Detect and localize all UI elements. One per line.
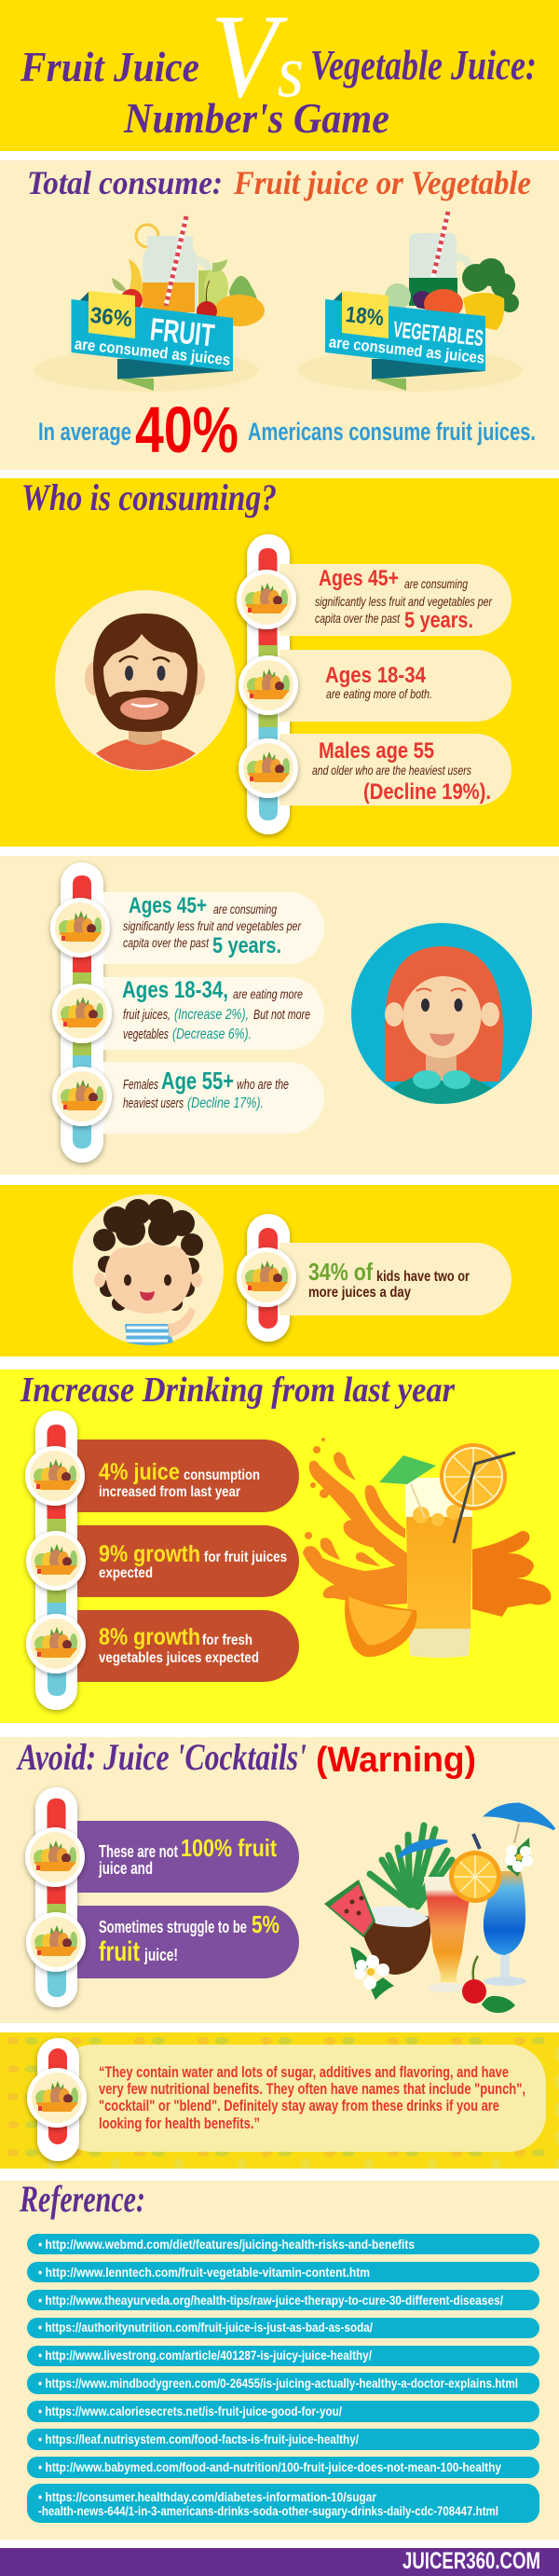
callout: females age 55+ [103,1062,324,1134]
callout: quote text [56,2045,546,2152]
callout: not 100% fruit: juice and [98,1859,153,1878]
callout: 34% of kids: 34% of [308,1258,373,1286]
reference link 10: • https://consumer.healthday.com/diabetes-information-10/sugar [38,2489,376,2504]
panel: title banner [0,0,559,151]
callout: struggle to be 5% [77,1906,299,1978]
callout: struggle to be 5%: Sometimes struggle to be [99,1918,247,1936]
callout: ages 18-34 [103,977,324,1050]
illustration: vegetable juice jar with ribbon: are consumed as juices [328,333,485,367]
title: Number's Game: Number's Game [123,94,389,142]
callout: ages 45+: are consuming [404,576,468,591]
callout: ages 45+: are consuming [213,902,277,916]
reference link 9 [27,2457,539,2478]
icon: fruit bowl 3 [239,738,298,798]
callout: ages 45+: capita over the past [315,611,401,626]
callout: females age 55+: Age 55+ [161,1067,234,1095]
callout: females age 55+: Females [123,1077,158,1093]
illustration: fruit juice jar with ribbon [34,216,265,392]
reference link 1: • http://www.webmd.com/diet/features/juicing-health-risks-and-benefits [38,2237,415,2252]
illustration: orange juice glass and splash [303,1438,551,1658]
callout: struggle to be 5%: 5% [252,1910,280,1938]
illustration: man portrait [55,590,236,771]
callout: ages 45+: capita over the past [123,935,210,950]
callout: struggle to be 5%: fruit [99,1936,140,1967]
timeline: three points [247,534,290,834]
callout: ages 45+: 5 years. [212,933,281,958]
reference link 1 [27,2234,539,2254]
heading: warning: (Warning) [316,1741,476,1780]
callout: not 100% fruit: 100% fruit [181,1834,277,1862]
illustration: vegetable juice jar with ribbon: VEGETABLES [392,317,484,351]
panel: increase drinking [0,1370,559,1723]
callout: ages 45+: Ages 45+ [319,566,399,591]
panel: references [0,2178,559,2540]
icon: fruit bowl 1 [237,570,296,629]
reference link 7 [27,2401,539,2422]
callout: 4% juice: 4% juice [99,1459,180,1485]
icon: fruit bowl 2 [26,1912,86,1972]
icon: fruit bowl 2 [26,1531,86,1591]
reference link 8: • https://leaf.nutrisystem.com/food-facts-is-fruit-juice-healthy/ [38,2431,359,2446]
icon: fruit bowl 2 [239,655,298,715]
illustration: kid portrait [73,1194,224,1345]
callout: 34% of kids: more juices a day [308,1285,411,1301]
callout: males age 55: and older who are the heaviest users [312,763,471,778]
callout: females age 55+: (Decline 17%). [187,1095,264,1111]
timeline: two points [35,1787,77,2007]
stat: in average 40%: In average [38,418,131,446]
illustration: fruit juice jar with ribbon: FRUIT [148,312,216,354]
callout: females age 55+: heaviest users [123,1095,184,1111]
timeline: three points [61,862,103,1163]
illustration: fruit juice jar with ribbon: are consumed as juices [74,335,231,369]
icon: fruit bowl [27,2068,87,2128]
timeline: one point [247,1214,290,1342]
panel: kids [0,1185,559,1357]
reference link 4: • https://authoritynutrition.com/fruit-juice-is-just-as-bad-as-soda/ [38,2320,373,2335]
callout: ages 45+: 5 years. [404,608,473,633]
callout: ages 45+: Ages 45+ [129,893,207,918]
callout: 9% growth [77,1525,299,1597]
callout: not 100% fruit: These are not [99,1842,178,1861]
illustration: fruit juice jar with ribbon: 36% [89,303,133,332]
callout: 8% growth [77,1610,299,1682]
callout: ages 45+: significantly less fruit and vegetables per [315,594,493,609]
icon: fruit bowl 3 [26,1614,86,1674]
icon: fruit bowl 3 [52,1067,112,1126]
illustration: vegetable juice jar with ribbon [297,212,523,392]
panel: who is consuming (men) [0,476,559,847]
icon: fruit bowl 2 [52,984,112,1043]
panel: quote [0,2032,559,2169]
panel: women [0,856,559,1175]
reference link 2 [27,2262,539,2282]
callout: ages 45+ [103,892,324,964]
icon: fruit bowl [237,1247,296,1307]
panel: avoid juice cocktails [0,1736,559,2023]
callout: 34% of kids [280,1243,511,1316]
heading: total consume: Total consume: [27,164,223,201]
reference link 7: • https://www.caloriesecrets.net/is-fruit-juice-good-for-you/ [38,2404,342,2418]
callout: 4% juice [77,1440,299,1512]
heading: reference: Reference: [19,2178,145,2220]
callout: 8% growth: 8% growth [99,1624,200,1650]
footer bar [0,2548,559,2576]
callout: males age 55: Males age 55 [319,738,434,764]
callout: 9% growth: for fruit juices [204,1550,287,1565]
callout: ages 18-34: vegetables [123,1026,169,1042]
callout: 34% of kids: kids have two or [376,1269,470,1285]
callout: 4% juice: increased from last year [99,1484,240,1500]
callout: males age 55 [280,734,511,806]
timeline: one point [37,2038,79,2161]
callout: 9% growth: 9% growth [99,1541,200,1567]
reference link 5 [27,2346,539,2366]
reference link 6 [27,2373,539,2394]
callout: ages 45+ [280,564,511,636]
callout: males age 55: (Decline 19%). [363,779,491,805]
heading: avoid juice cocktails: Avoid: Juice 'Cocktails' [16,1736,307,1778]
callout: quote text: looking for health benefits.” [99,2115,260,2132]
callout: ages 18-34: are eating more of both. [326,686,432,701]
reference link 8 [27,2429,539,2450]
icon: fruit bowl 1 [25,1446,85,1506]
heading: increase drinking: Increase Drinking from last year [20,1371,456,1410]
callout: ages 18-34: Ages 18-34 [325,663,427,688]
callout: 4% juice: consumption [184,1467,260,1483]
callout: 8% growth: for fresh [202,1632,252,1648]
illustration: tropical cocktails [324,1804,554,2013]
timeline: three points [35,1411,77,1710]
callout: ages 18-34: (Increase 2%), [174,1007,249,1023]
callout: females age 55+: who are the [237,1077,289,1093]
icon: fruit bowl 1 [50,898,110,957]
illustration: woman portrait [351,923,532,1104]
stat: in average 40% [38,393,536,466]
panel: total consume [0,160,559,470]
callout: ages 18-34: (Decrease 6%). [172,1026,252,1042]
title: Fruit Juice: Fruit Juice [20,43,199,90]
callout: ages 18-34: are eating more [233,986,303,1001]
reference link 10 [27,2484,539,2523]
callout: not 100% fruit [77,1821,299,1893]
callout: ages 45+: significantly less fruit and vegetables per [123,918,302,933]
heading: fruit juice or vegetable: Fruit juice or Vegetable [233,164,531,201]
heading: who is consuming: Who is consuming? [21,476,277,518]
callout: struggle to be 5%: juice! [143,1946,178,1964]
callout: ages 18-34: But not more [253,1007,310,1023]
illustration: vegetable juice jar with ribbon: 18% [345,302,385,331]
reference link 2: • http://www.lenntech.com/fruit-vegetable-vitamin-content.htm [38,2265,370,2280]
reference link 5: • http://www.livestrong.com/article/401287-is-juicy-juice-healthy/ [38,2348,372,2362]
reference link 3 [27,2290,539,2310]
callout: ages 18-34: Ages 18-34, [122,977,228,1003]
callout: ages 18-34: fruit juices, [123,1007,170,1023]
callout: 9% growth: expected [99,1565,153,1581]
callout: ages 18-34 [280,650,511,722]
icon: fruit bowl 1 [25,1827,85,1887]
callout: 8% growth: vegetables juices expected [99,1650,259,1666]
reference link 4 [27,2318,539,2338]
stat: in average 40%: 40% [135,393,239,466]
